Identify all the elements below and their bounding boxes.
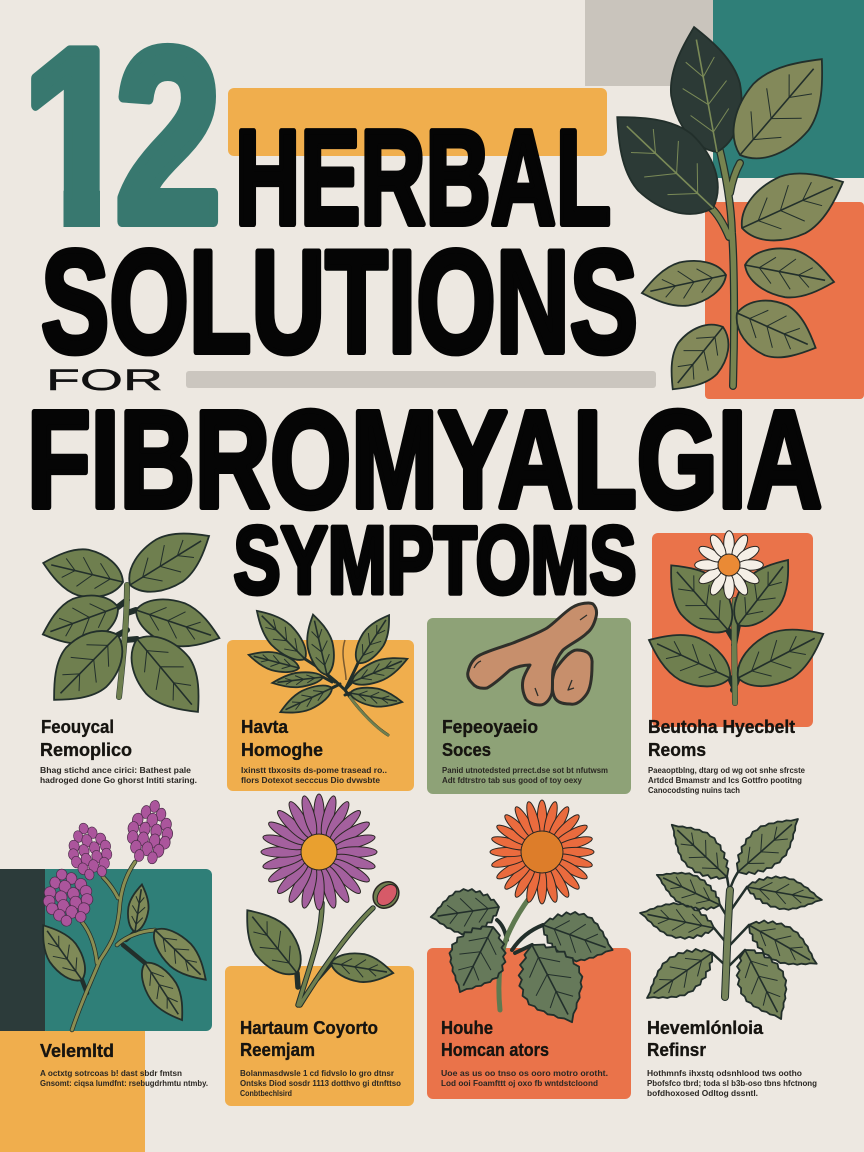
heading: card 8: Refinsr bbox=[647, 1039, 706, 1060]
divider bar beside FOR bbox=[186, 371, 656, 388]
heading: card 4 bbox=[648, 716, 795, 760]
title: number 12: 1 bbox=[22, 0, 132, 274]
text: card 5 bbox=[40, 1068, 208, 1088]
text: card 1 bbox=[40, 765, 197, 785]
heading: card 1: Feouycal bbox=[41, 716, 114, 737]
illustration: orange daisy plant bbox=[427, 800, 621, 1037]
text: card 7: Uoe as us oo tnso os ooro motro orotht. bbox=[441, 1068, 608, 1078]
illustration: plant 8 bbox=[635, 804, 826, 1030]
text: card 6: Ontsks Diod sosdr 1113 dotthvo gi dtnfttso bbox=[240, 1078, 401, 1088]
heading: card 3 bbox=[442, 716, 538, 760]
illustration: white daisy plant bbox=[639, 531, 835, 703]
text: card 7: Lod ooi Foamfttt oj oxo fb wntdstcloond bbox=[441, 1078, 598, 1088]
heading: card 4: Beutoha Hyecbelt bbox=[648, 716, 795, 737]
text: card 2: flors Dotexot secccus Dio dvwsbte bbox=[241, 775, 380, 785]
text: card 8: bofdhoxosed Odltog dssntl. bbox=[647, 1088, 758, 1098]
illustration: plant 1 bbox=[34, 515, 226, 730]
heading: card 7: Houhe bbox=[441, 1017, 493, 1038]
panel: gray corner block bbox=[585, 0, 713, 86]
heading: card 4: Reoms bbox=[648, 739, 706, 760]
panel: orange card 7 bbox=[427, 948, 631, 1099]
text: card 1: Bhag stichd ance cirici: Bathest pale bbox=[40, 765, 191, 775]
panel: teal corner block bbox=[713, 0, 864, 178]
panel: yellow corner block bbox=[0, 1031, 145, 1152]
heading: card 1 bbox=[40, 716, 132, 760]
text: card 4 bbox=[648, 765, 805, 795]
text: card 1: hadroged done Go ghorst Intiti staring. bbox=[40, 775, 197, 785]
panel: yellow card 6 bbox=[225, 966, 414, 1106]
heading: card 6: Hartaum Coyorto bbox=[240, 1017, 378, 1038]
heading: card 8: Hevemlónloia bbox=[647, 1017, 764, 1038]
text: card 4: Paeaoptblng, dtarg od wg oot snhe sfrcste bbox=[648, 765, 805, 775]
illustration: plant 2 bbox=[246, 601, 411, 735]
panel: dark block bbox=[0, 869, 45, 1031]
text: card 3: Panid utnotedsted prrect.dse sot bt nfutwsm bbox=[442, 765, 608, 775]
text: card 7 bbox=[441, 1068, 608, 1088]
panel: yellow title bar bbox=[228, 88, 607, 156]
text: card 5: A octxtg sotrcoas b! dast sbdr fmtsn bbox=[40, 1068, 182, 1078]
title: number 12: 2 bbox=[115, 0, 222, 274]
illustration: purple cluster plant bbox=[30, 797, 216, 1030]
heading: card 2: Homoghe bbox=[241, 739, 323, 760]
text: card 3 bbox=[442, 765, 608, 785]
heading: card 2 bbox=[241, 716, 323, 760]
title: number 12 bbox=[31, 42, 218, 227]
heading: card 6: Reemjam bbox=[240, 1039, 315, 1060]
text: card 5: Gnsomt: ciqsa lumdfnt: rsebugdrhmtu ntmby. bbox=[40, 1078, 208, 1088]
text: card 3: Adt fdtrstro tab sus good of toy oexy bbox=[442, 775, 582, 785]
heading: card 8 bbox=[647, 1017, 764, 1060]
title: FOR: FOR bbox=[46, 364, 163, 397]
text: card 2 bbox=[241, 765, 387, 785]
text: card 4: Canocodsting nuins tach bbox=[648, 785, 740, 795]
text: card 6: Bolanmasdwsle 1 cd fidvslo lo gro dtnsr bbox=[240, 1068, 395, 1078]
title: HERBAL: HERBAL bbox=[235, 102, 611, 253]
text: card 6: Conbtbechlsird bbox=[240, 1088, 292, 1098]
heading: card 7: Homcan ators bbox=[441, 1039, 549, 1060]
text: card 2: Ixinstt tbxosits ds-pome trasead ro.. bbox=[241, 765, 387, 775]
illustration: purple daisy plant bbox=[231, 794, 404, 1005]
text: card 8 bbox=[647, 1068, 817, 1098]
heading: card 2: Havta bbox=[241, 716, 289, 737]
heading: card 1: Remoplico bbox=[40, 739, 132, 760]
panel: green card 3 bbox=[427, 618, 631, 794]
text: card 8: Pbofsfco tbrd; toda sl b3b-oso tbns hfctnong bbox=[647, 1078, 817, 1088]
heading: card 6 bbox=[240, 1017, 378, 1060]
heading: card 7 bbox=[441, 1017, 549, 1060]
illustration: top plant bbox=[590, 21, 856, 405]
heading: card 3: Soces bbox=[442, 739, 491, 760]
text: card 4: Artdcd Bmamstr and Ics Gottfro pootitng bbox=[648, 775, 802, 785]
text: card 6 bbox=[240, 1068, 401, 1098]
panel: yellow card 2 bbox=[227, 640, 414, 791]
panel: orange card 4 bbox=[652, 533, 813, 727]
illustration: ginger root bbox=[468, 603, 597, 705]
panel: teal card 5 bbox=[40, 869, 212, 1031]
panel: orange block behind top plant bbox=[705, 202, 864, 399]
title: SYMPTOMS: SYMPTOMS bbox=[234, 507, 636, 614]
text: card 8: Hothmnfs ihxstq odsnhlood tws ootho bbox=[647, 1068, 802, 1078]
heading: card 3: Fepeoyaeio bbox=[442, 716, 538, 737]
heading: card 5: Velemltd bbox=[40, 1040, 114, 1061]
